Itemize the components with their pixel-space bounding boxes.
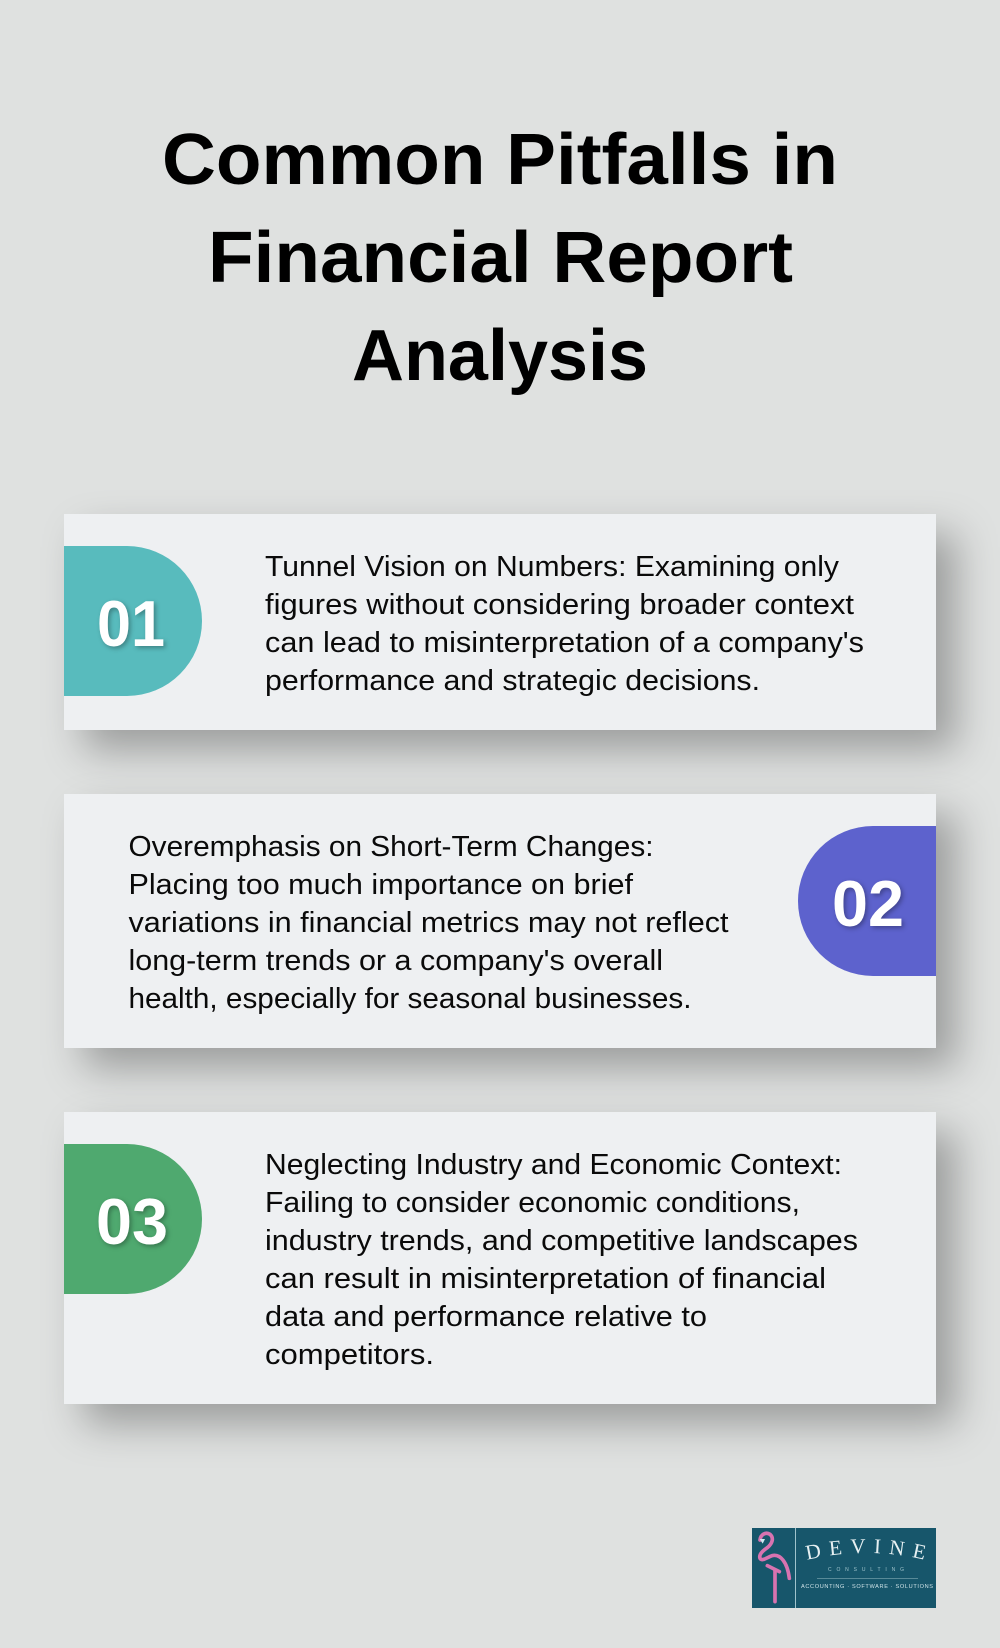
panel: pitfall 01	[64, 514, 936, 730]
logo: devine consulting	[752, 1528, 936, 1608]
text: overemphasis on short-term changes: Overemphasis on Short-Term Changes:	[128, 831, 654, 863]
text: neglecting industry and economic context: can result in misinterpretation of financial	[265, 1263, 826, 1295]
logo wordmark	[801, 1539, 933, 1590]
number badge 01: 01	[97, 587, 165, 660]
card background 03	[64, 1112, 936, 1404]
logo wordmark: ACCOUNTING · SOFTWARE · SOLUTIONS	[801, 1584, 933, 1590]
text: overemphasis on short-term changes: long-term trends or a company's overall	[128, 945, 663, 977]
text: neglecting industry and economic context: Neglecting Industry and Economic Context:	[265, 1149, 842, 1181]
logo wordmark: CONSULTING	[828, 1567, 904, 1573]
number badge 01	[64, 546, 202, 696]
card background 01	[64, 514, 936, 730]
panel: pitfall 03	[64, 1112, 936, 1404]
number badge 03	[64, 1144, 202, 1294]
text: tunnel vision on numbers: can lead to misinterpretation of a company's	[265, 627, 864, 659]
text: tunnel vision on numbers: figures without considering broader context	[265, 589, 854, 621]
logo wordmark: DEVINE	[805, 1539, 926, 1560]
title: Analysis	[352, 316, 648, 396]
title	[162, 120, 838, 396]
text: tunnel vision on numbers: Tunnel Vision on Numbers: Examining only	[265, 551, 840, 583]
text: neglecting industry and economic context	[265, 1149, 858, 1371]
title: Common Pitfalls in	[162, 120, 838, 200]
title: Financial Report	[208, 218, 793, 298]
text: neglecting industry and economic context: competitors.	[265, 1339, 434, 1371]
text: tunnel vision on numbers: performance and strategic decisions.	[265, 665, 760, 697]
icon: flamingo	[760, 1533, 789, 1602]
panel: pitfall 02	[64, 794, 936, 1048]
text: overemphasis on short-term changes: variations in financial metrics may not reflect	[128, 907, 729, 939]
text: overemphasis on short-term changes: health, especially for seasonal businesses.	[128, 983, 692, 1015]
number badge 03: 03	[96, 1185, 168, 1258]
text: neglecting industry and economic context: data and performance relative to	[265, 1301, 707, 1333]
text: overemphasis on short-term changes	[128, 831, 729, 1015]
text: overemphasis on short-term changes: Placing too much importance on brief	[128, 869, 633, 901]
number badge 02	[798, 826, 936, 976]
text: tunnel vision on numbers	[265, 551, 864, 697]
text: neglecting industry and economic context: industry trends, and competitive landscapes	[265, 1225, 858, 1257]
text: neglecting industry and economic context: Failing to consider economic conditions,	[265, 1187, 800, 1219]
card background 02	[64, 794, 936, 1048]
number badge 02: 02	[832, 867, 904, 940]
